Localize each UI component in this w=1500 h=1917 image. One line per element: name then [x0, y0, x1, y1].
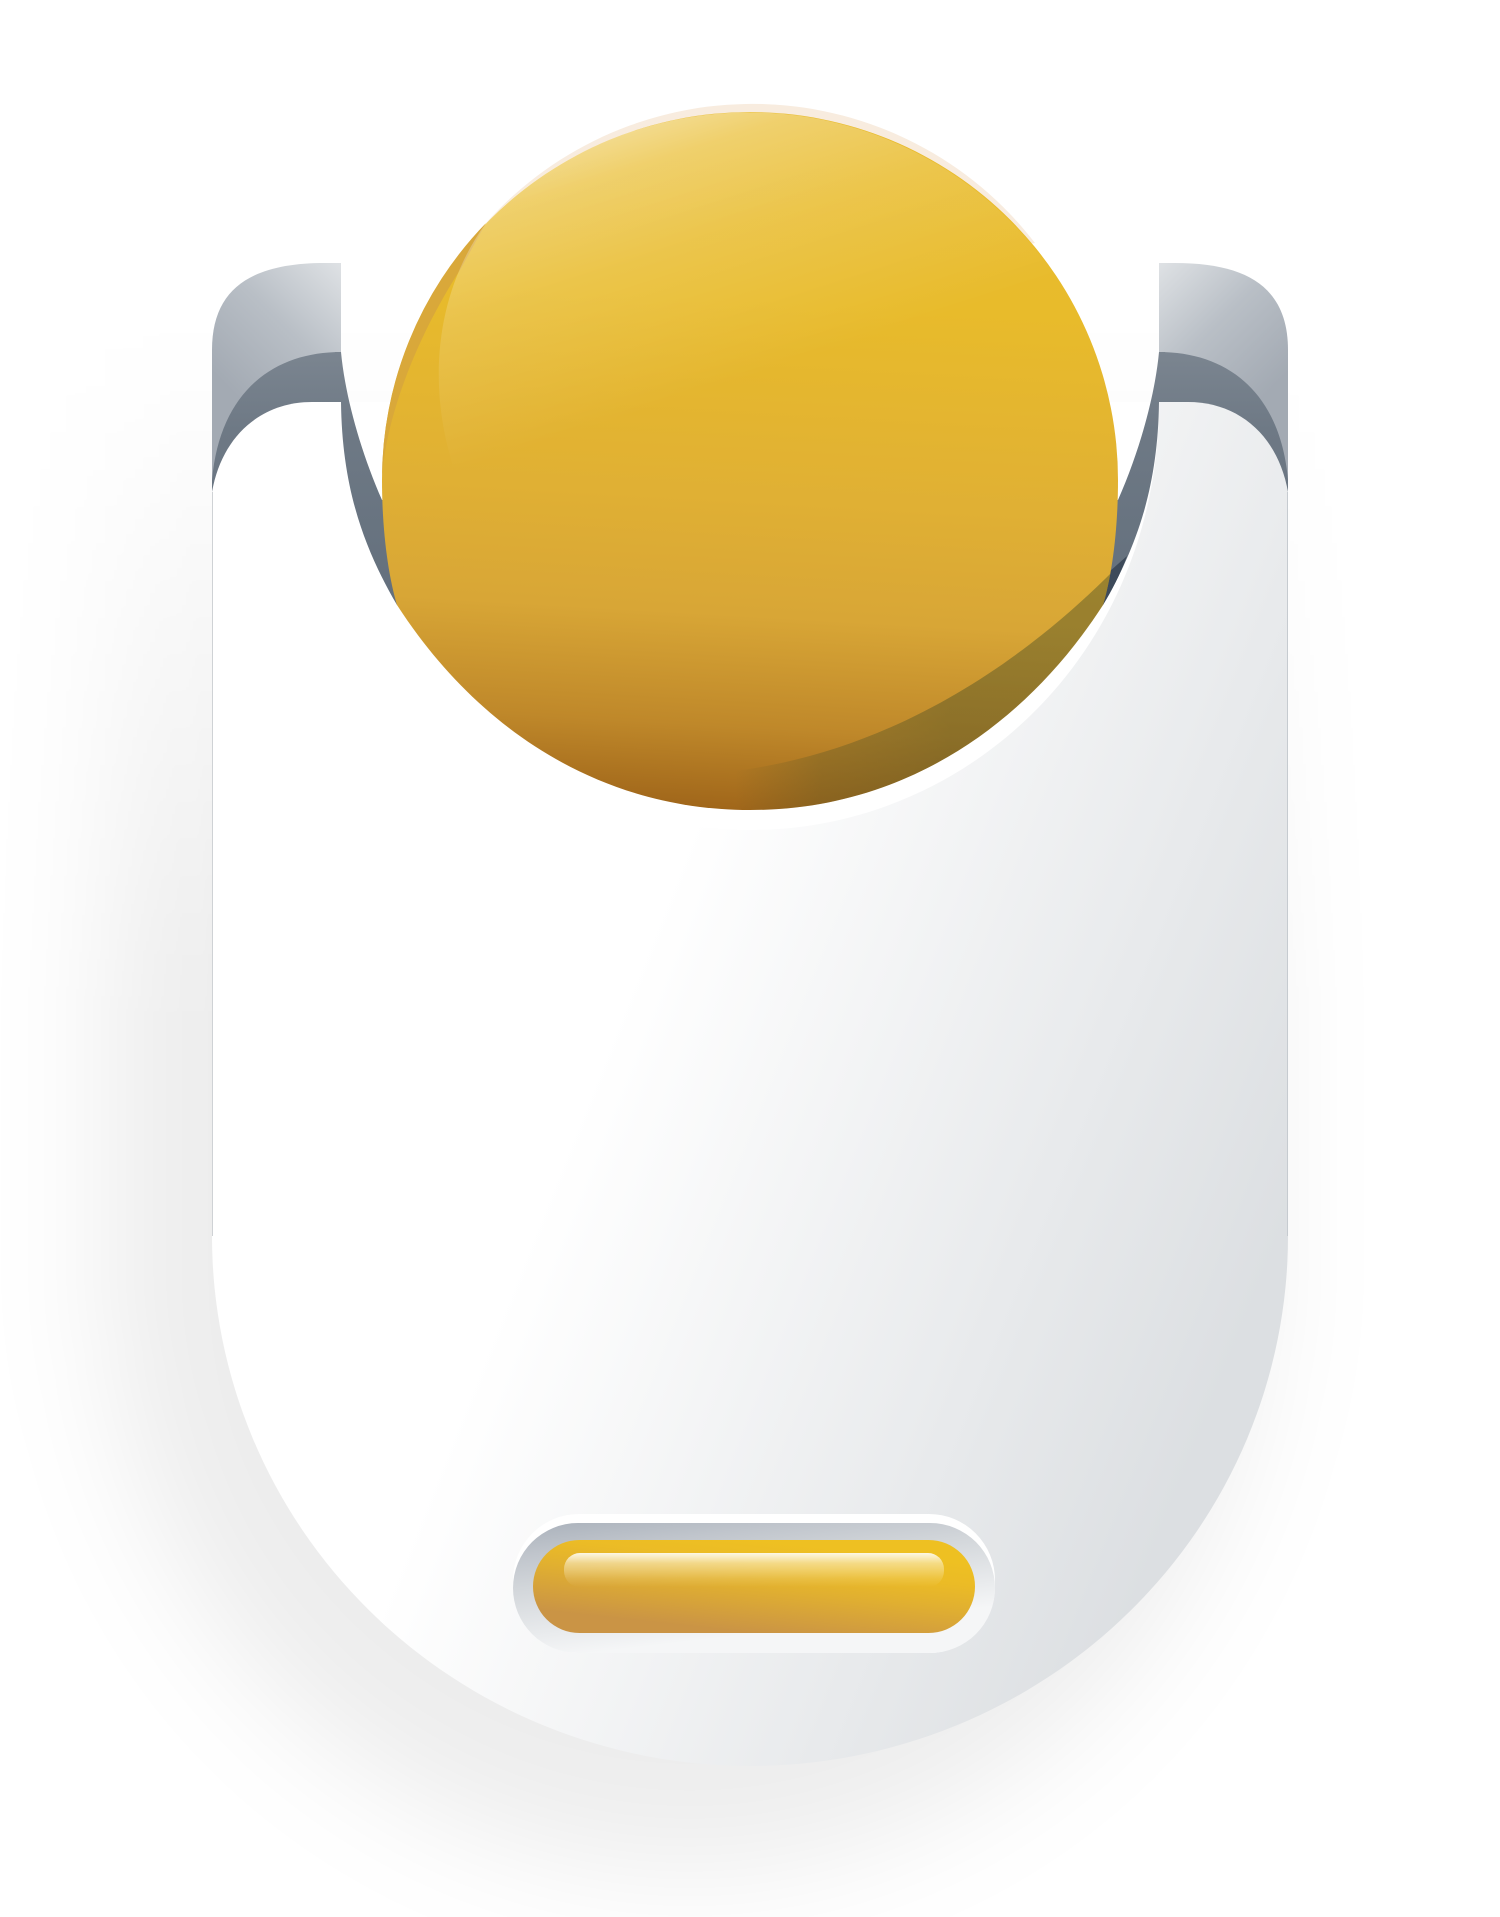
pill gold fill — [533, 1540, 975, 1633]
disc lower shade — [759, 574, 1110, 810]
left flap — [212, 263, 341, 492]
body right edge line — [1287, 492, 1288, 1236]
disc highlight — [439, 112, 1117, 480]
right flap — [1159, 263, 1288, 492]
left slate arch — [212, 352, 341, 500]
slate notch strip — [335, 352, 1165, 790]
slate shade sliver — [1100, 556, 1127, 605]
pill grey ring — [513, 1523, 995, 1653]
right slate arch — [1159, 352, 1288, 500]
drop shadow — [105, 340, 1260, 1870]
gold disc — [382, 112, 1130, 830]
pill white rim — [513, 1514, 995, 1653]
pill button — [513, 1514, 995, 1653]
badge illustration — [101, 104, 1288, 1872]
pill highlight — [564, 1553, 944, 1587]
card body — [212, 402, 1288, 1766]
white notch band — [341, 402, 1159, 830]
disc left crescent — [382, 223, 486, 480]
body left edge line — [212, 492, 213, 1236]
disc top rim — [486, 104, 1035, 300]
